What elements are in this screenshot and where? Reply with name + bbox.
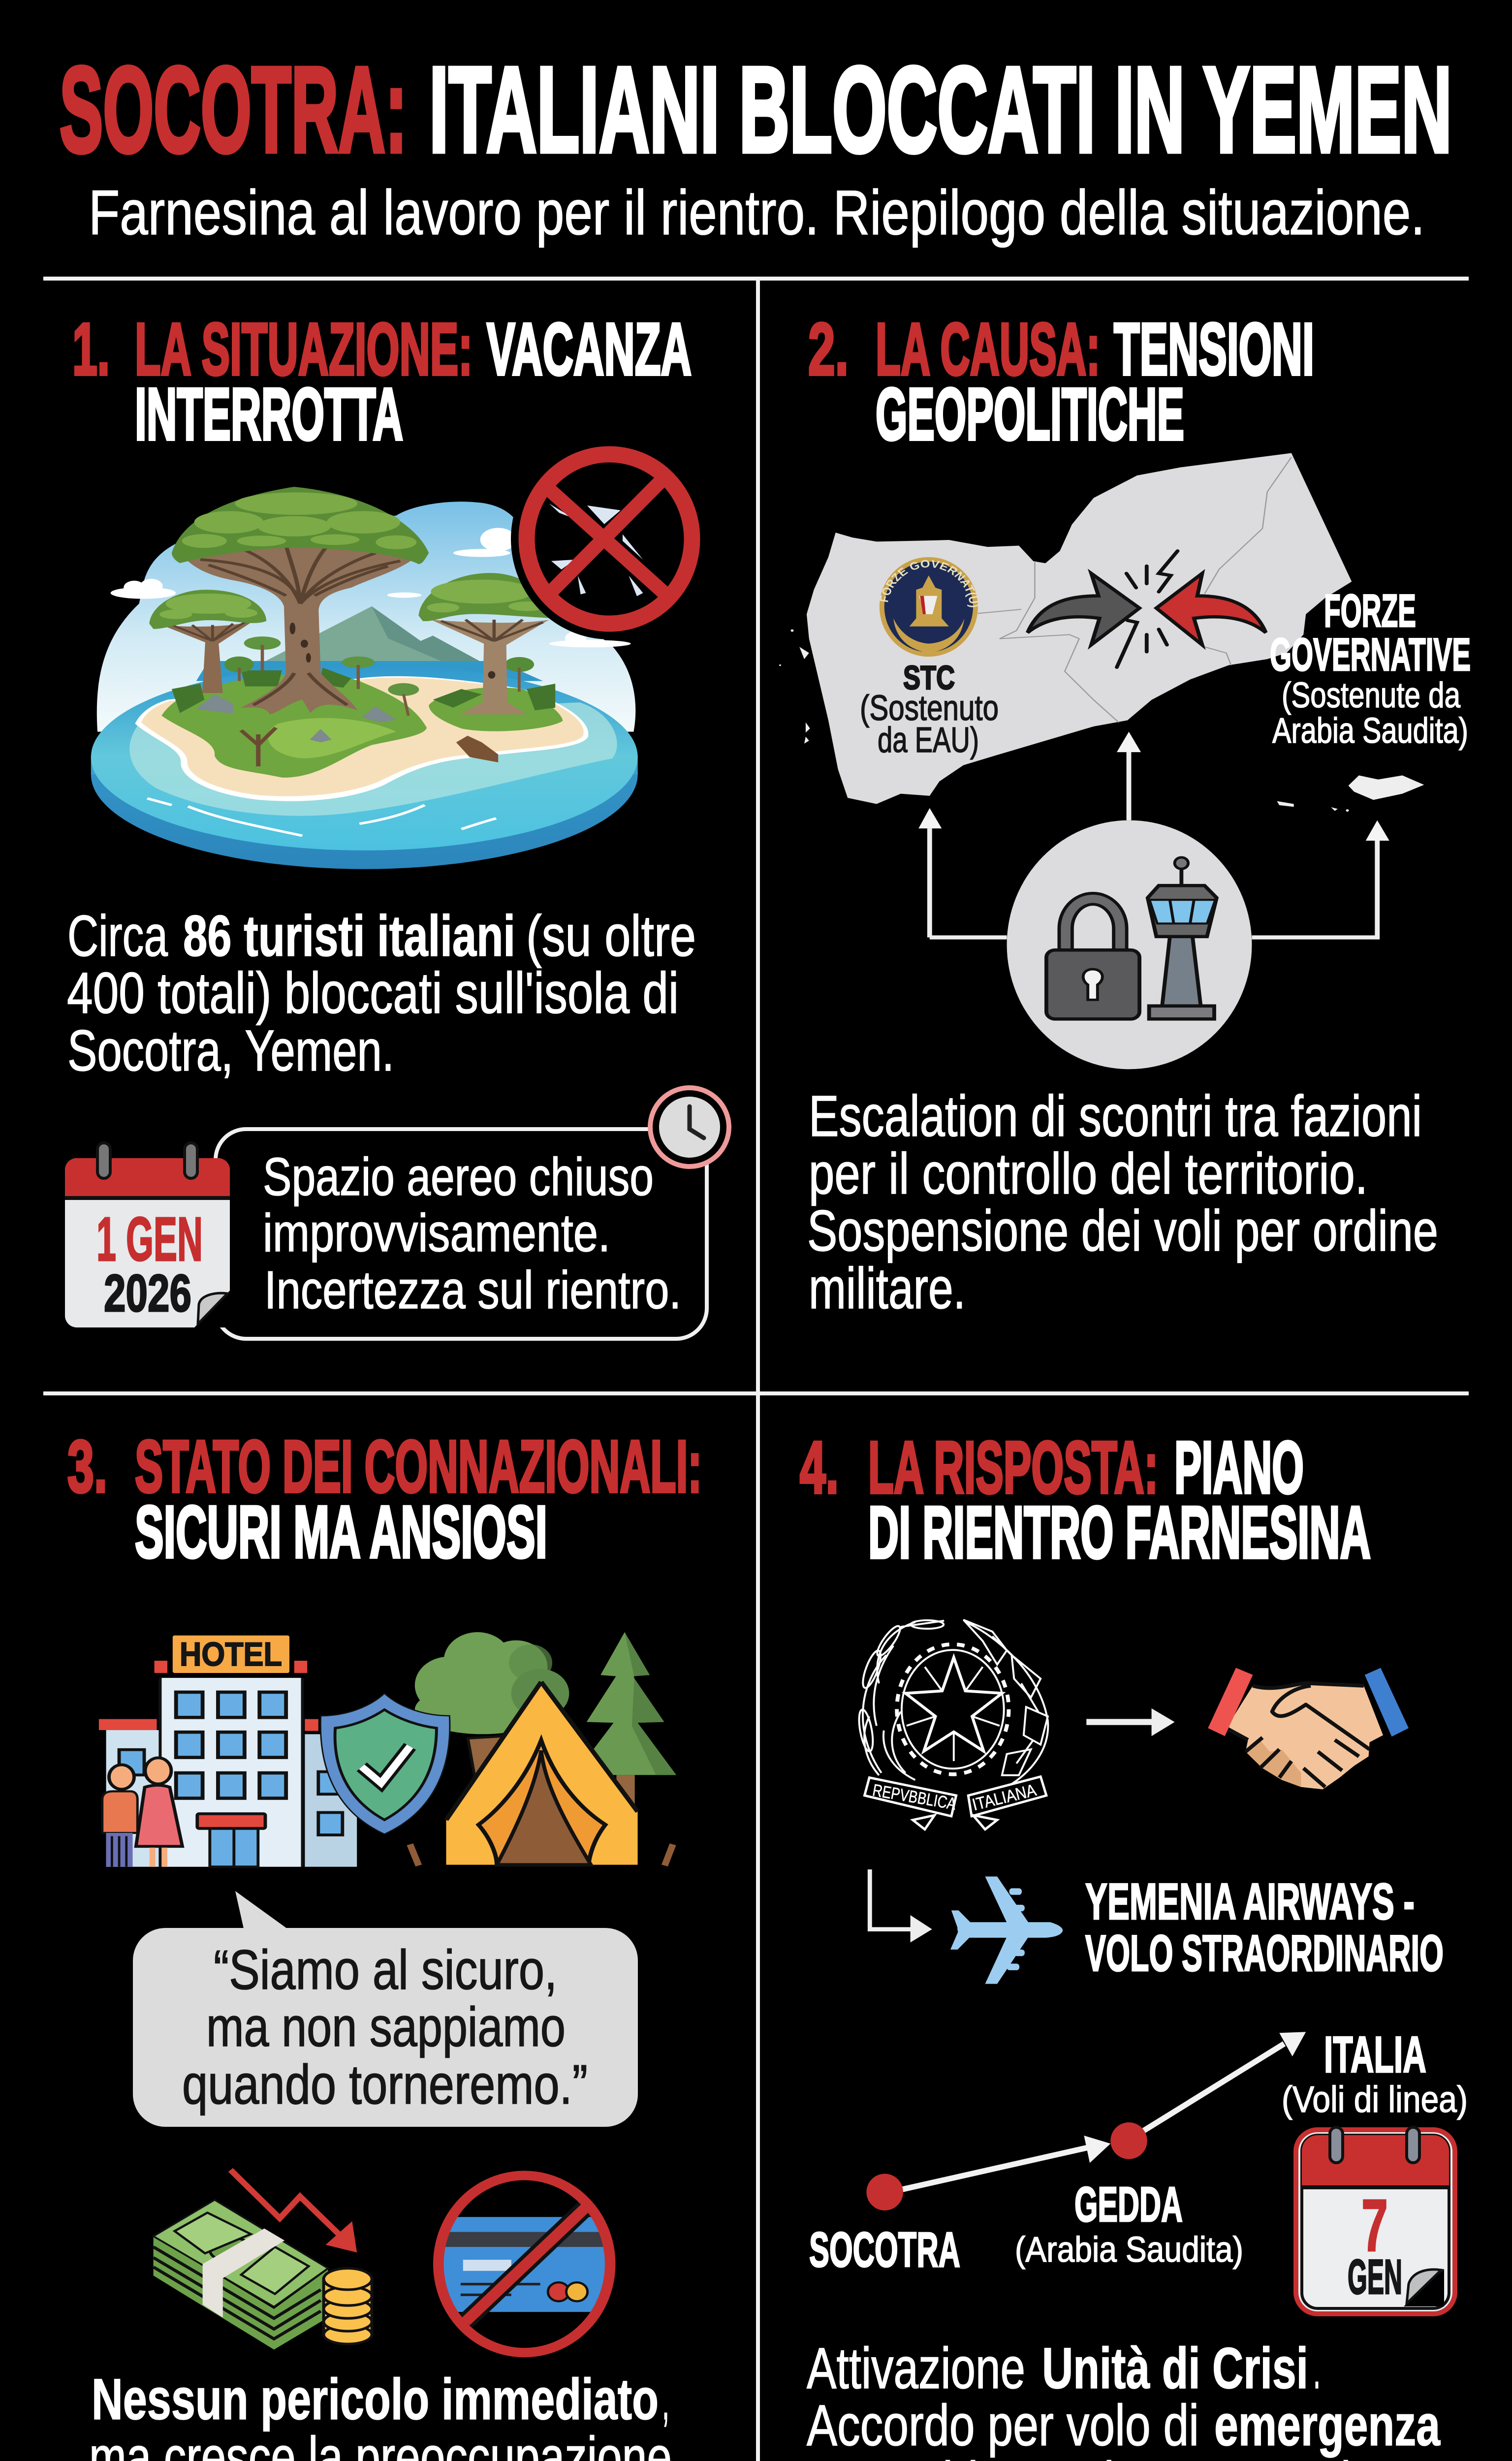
heading 3 [67, 1425, 702, 1573]
text: risposta: Unità di Crisi [1042, 2336, 1308, 2401]
mountain [266, 606, 482, 663]
disc [91, 680, 638, 869]
heading 4: LA RISPOSTA: [868, 1426, 1158, 1509]
panel: la risposta [800, 1426, 1468, 2461]
main tree [184, 543, 412, 714]
tree [415, 1632, 569, 1779]
shield [320, 1693, 450, 1834]
heading 2: GEOPOLITICHE [876, 373, 1184, 455]
labels: route [809, 2026, 1468, 2277]
text: situazione: 400 totali) bloccati sull'isola di [67, 961, 679, 1026]
text: causa: militare. [809, 1256, 966, 1321]
callout: quote bubble: ma non sappiamo [206, 1996, 566, 2058]
illustration: Socotra island [91, 487, 638, 869]
icon: calendar 7 gen: 7 [1361, 2184, 1388, 2267]
heading 3: 3. [67, 1425, 107, 1508]
labels: route: (Voli di linea) [1282, 2079, 1468, 2120]
callout: spazio aereo chiuso: improvvisamente. [263, 1203, 610, 1263]
text: situazione: Circa [67, 904, 168, 969]
icon: calendar 7 gen [1296, 2127, 1455, 2314]
icon: plane [950, 1876, 1063, 1984]
icon: no flights [511, 439, 708, 639]
icon: handshake [1208, 1668, 1409, 1789]
left tree [161, 620, 255, 693]
text: situazione: Socotra, Yemen. [67, 1018, 394, 1083]
text: stato: Nessun pericolo immediato [92, 2367, 659, 2432]
heading 1: LA SITUAZIONE: [135, 308, 472, 390]
route: Socotra to Gedda to Italia [866, 2032, 1306, 2210]
heading 3: STATO DEI CONNAZIONALI: [135, 1425, 702, 1508]
heading 2 [808, 308, 1314, 455]
labels: route: GEDDA [1074, 2177, 1183, 2232]
label: STC: da EAU) [878, 721, 979, 760]
label: forze governative: Arabia Saudita) [1272, 711, 1468, 751]
text: risposta [807, 2336, 1441, 2461]
right tree [431, 620, 549, 714]
text: risposta: emergenza [1214, 2393, 1441, 2458]
icon: clash arrows [1028, 551, 1266, 667]
label: forze governative: (Sostenute da [1282, 676, 1461, 715]
panel: stato dei connazionali [67, 1425, 702, 2461]
emblem: STC [879, 557, 979, 657]
text: causa [807, 1084, 1438, 1321]
text: risposta: . [1313, 2336, 1321, 2401]
small trees [224, 636, 534, 766]
label: STC [860, 659, 999, 760]
labels: route: (Arabia Saudita) [1015, 2230, 1243, 2270]
icon: money and coins [154, 2170, 372, 2350]
text: stato [89, 2367, 672, 2461]
label: forze governative [1270, 585, 1471, 751]
heading 1: 1. [72, 308, 110, 390]
icon: calendar 1 gen: 2026 [104, 1263, 191, 1323]
coins [324, 2268, 372, 2344]
callout: spazio aereo chiuso [216, 1129, 707, 1339]
icon: calendar 1 gen: 1 GEN [96, 1204, 203, 1274]
green main [161, 674, 427, 778]
heading 2: LA CAUSA: [876, 308, 1100, 390]
arrow: emblem to handshake [1086, 1708, 1175, 1736]
text: risposta: Attivazione [807, 2336, 1025, 2401]
label: STC: STC [903, 659, 955, 696]
icon: people [102, 1758, 182, 1867]
labels: route: SOCOTRA [809, 2222, 960, 2277]
text: situazione: (su oltre [526, 904, 696, 969]
emblem: Repubblica Italiana [856, 1620, 1048, 1830]
heading 3: SICURI MA ANSIOSI [135, 1490, 547, 1573]
callout: spazio aereo chiuso: Spazio aereo chiuso [263, 1147, 654, 1207]
labels: route: ITALIA [1324, 2026, 1426, 2083]
title: SOCOTRA: [60, 42, 407, 178]
heading 1 [72, 308, 692, 455]
icon: Socotra islands [1277, 775, 1424, 812]
label: forze governative: FORZE [1324, 585, 1416, 636]
heading 4: 4. [800, 1426, 839, 1509]
panel: la causa [779, 308, 1471, 1321]
pine [574, 1632, 676, 1812]
text: risposta: Accordo per volo di [807, 2393, 1199, 2458]
heading 4 [800, 1426, 1371, 1574]
icon: clock [648, 1085, 731, 1169]
heading 1: VACANZA [487, 308, 692, 390]
arrow: handshake to flight [870, 1869, 932, 1942]
icon: no credit card [434, 2176, 617, 2353]
heading 2: TENSIONI [1114, 308, 1314, 390]
text: situazione: 86 turisti italiani [183, 904, 515, 969]
icon: calendar 1 gen [65, 1143, 230, 1327]
rocks [196, 694, 396, 742]
text: situazione [67, 904, 696, 1083]
heading 2: 2. [808, 308, 849, 390]
label: Yemenia Airways [1085, 1873, 1444, 1982]
heading 4: PIANO [1174, 1426, 1304, 1509]
icon: hotel [99, 1636, 357, 1867]
emblem: Repubblica Italiana: ITALIANA [970, 1780, 1039, 1814]
map: Yemen [779, 453, 1424, 1069]
label: STC: (Sostenuto [860, 689, 999, 728]
heading 1: INTERROTTA [135, 373, 403, 455]
emblem: Repubblica Italiana: REPVBBLICA [871, 1781, 958, 1814]
text: stato: , [662, 2367, 669, 2432]
arrows: airspace closed to map [918, 732, 1389, 937]
tent [410, 1682, 673, 1865]
icon: lock and control tower [1007, 820, 1252, 1069]
callout: quote bubble [133, 1891, 638, 2127]
icon: shield and camp [320, 1632, 676, 1865]
text: causa: per il controllo del territorio. [809, 1141, 1368, 1206]
panel: la situazione [65, 308, 731, 1339]
callout: spazio aereo chiuso: Incertezza sul rientro. [264, 1260, 681, 1320]
emblem: STC: FORZE GOVERNAT(U) [879, 560, 979, 607]
callout: quote bubble: “Siamo al sicuro, [214, 1939, 557, 2001]
sand [135, 676, 588, 801]
callout: quote bubble: quando torneremo.” [182, 2053, 588, 2115]
icon: calendar 7 gen: GEN [1348, 2249, 1402, 2304]
text: hotel sign: HOTEL [180, 1636, 282, 1673]
